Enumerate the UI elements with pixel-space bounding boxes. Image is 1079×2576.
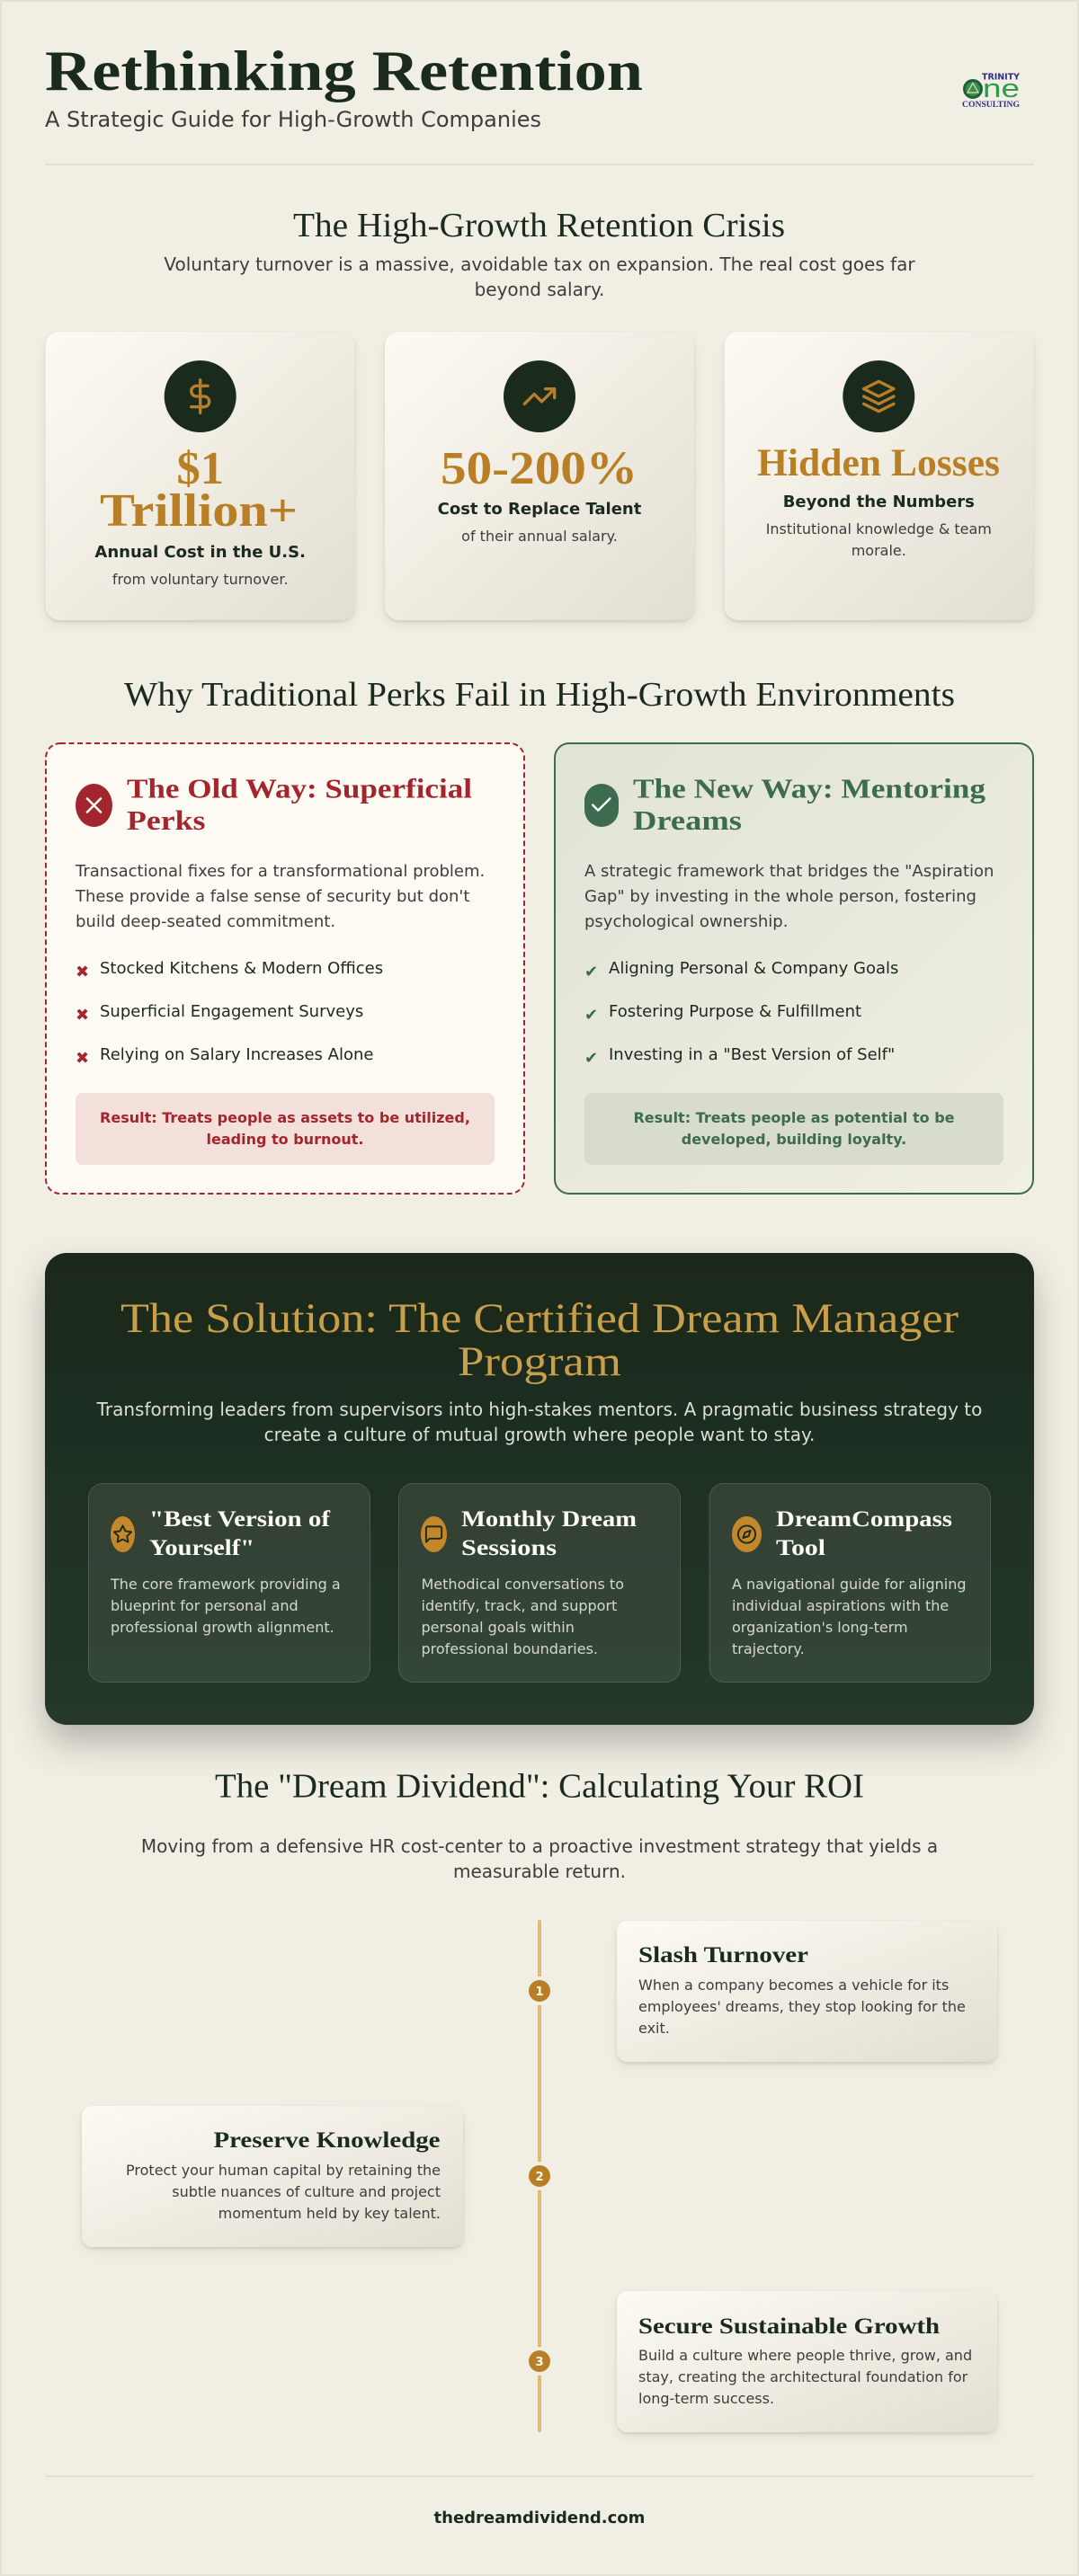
card text: identify, track, and support <box>421 1597 617 1614</box>
panel heading: Program <box>458 1338 621 1385</box>
panel heading: The Solution: The Certified Dream Manager <box>120 1295 959 1342</box>
timeline node 1 <box>525 1976 554 2005</box>
timeline card 1: Slash Turnover <box>638 1941 808 1968</box>
intro text: Voluntary turnover is a massive, avoidable tax on expansion. The real cost goes far <box>164 253 915 275</box>
timeline node 3 <box>525 2347 554 2376</box>
card: dreamcompass tool <box>709 1483 991 1683</box>
list: Investing in a "Best Version of Self" <box>609 1045 895 1064</box>
card text: Methodical conversations to <box>421 1576 624 1593</box>
list: Relying on Salary Increases Alone <box>100 1045 373 1064</box>
panel heading: The Old Way: Superficial <box>127 773 472 804</box>
stat value: $1 <box>176 443 224 494</box>
result callout: developed, building loyalty. <box>682 1131 906 1148</box>
list: Aligning Personal & Company Goals <box>609 959 898 978</box>
logo: Trinity One Consulting: CONSULTING <box>962 100 1020 109</box>
section: retention crisis <box>164 207 915 300</box>
subtitle: A Strategic Guide for High-Growth Companies <box>45 107 541 132</box>
stat note: Institutional knowledge & team <box>766 520 992 537</box>
stat card: 50-200% <box>385 332 694 620</box>
header <box>45 39 1021 132</box>
card heading: Sessions <box>461 1536 557 1560</box>
card: best version of yourself <box>88 1483 370 1683</box>
panel intro: Transforming leaders from supervisors into high-stakes mentors. A pragmatic business strategy to <box>96 1399 982 1420</box>
section: dream dividend <box>141 1767 938 1882</box>
timeline card 3: Build a culture where people thrive, grow, and <box>638 2347 972 2364</box>
logo: Trinity One Consulting <box>962 72 1021 109</box>
list: Stocked Kitchens & Modern Offices <box>100 959 383 978</box>
icon: dollar <box>165 360 236 432</box>
panel: the old way <box>46 743 524 1194</box>
logo: Trinity One Consulting: TRINITY <box>982 72 1021 83</box>
timeline card 1: exit. <box>638 2020 670 2037</box>
panel text: Transactional fixes for a transformational problem. <box>75 862 485 881</box>
timeline card 3 <box>617 2291 997 2432</box>
card: monthly dream sessions <box>399 1483 680 1683</box>
result callout: leading to burnout. <box>207 1131 363 1148</box>
list: Fostering Purpose & Fulfillment <box>609 1002 861 1021</box>
intro text: beyond salary. <box>475 279 604 300</box>
card heading: Tool <box>776 1536 825 1560</box>
panel heading: Dreams <box>633 804 742 836</box>
card heading: Yourself" <box>149 1536 254 1560</box>
list: ✖ <box>76 1049 89 1068</box>
list: ✖ <box>76 963 89 982</box>
title: Rethinking Retention <box>45 39 643 102</box>
panel: the solution <box>45 1253 1034 1725</box>
result callout: Result: Treats people as assets to be utilized, <box>100 1109 470 1126</box>
logo: Trinity One Consulting: ne <box>983 75 1020 103</box>
card text: professional boundaries. <box>421 1640 598 1657</box>
heading: The High-Growth Retention Crisis <box>293 207 785 244</box>
icon: check <box>584 784 619 827</box>
list: Superficial Engagement Surveys <box>100 1002 363 1021</box>
icon: x <box>76 784 112 827</box>
timeline card 1: employees' dreams, they stop looking for the <box>638 1998 966 2015</box>
timeline card 2: subtle nuances of culture and project <box>172 2183 441 2200</box>
timeline node 2 <box>525 2162 554 2190</box>
card heading: "Best Version of <box>149 1507 331 1532</box>
timeline card 2 <box>82 2106 463 2247</box>
panel intro: create a culture of mutual growth where people want to stay. <box>264 1424 815 1445</box>
stat card: Hidden Losses <box>725 332 1034 620</box>
list <box>76 959 383 1068</box>
timeline card 1: When a company becomes a vehicle for its <box>638 1976 949 1994</box>
list: ✖ <box>76 1006 89 1025</box>
heading: The "Dream Dividend": Calculating Your ROI <box>215 1767 864 1805</box>
panel heading: The New Way: Mentoring <box>633 773 986 804</box>
timeline card 2: momentum held by key talent. <box>218 2205 441 2222</box>
panel text: These provide a false sense of security but don't <box>75 887 469 906</box>
timeline card 2: Preserve Knowledge <box>214 2127 441 2153</box>
stat value: Trillion+ <box>100 485 298 537</box>
stat label: Annual Cost in the U.S. <box>94 543 306 562</box>
timeline node 1: 1 <box>535 1985 544 1999</box>
card text: individual aspirations with the <box>732 1597 949 1614</box>
list <box>584 959 898 1068</box>
card text: blueprint for personal and <box>111 1597 299 1614</box>
list: ✔ <box>584 1006 598 1025</box>
intro text: Moving from a defensive HR cost-center to a proactive investment strategy that yields a <box>141 1835 938 1857</box>
stat note: from voluntary turnover. <box>112 571 289 588</box>
card text: professional growth alignment. <box>111 1619 334 1636</box>
panel text: Gap" by investing in the whole person, fostering <box>584 887 976 906</box>
list: ✔ <box>584 1049 598 1068</box>
panel text: A strategic framework that bridges the "Aspiration <box>584 862 994 881</box>
icon: compass <box>732 1516 762 1552</box>
timeline card 1 <box>617 1921 997 2062</box>
card text: trajectory. <box>732 1640 805 1657</box>
timeline card 3: long-term success. <box>638 2390 774 2407</box>
card text: organization's long-term <box>732 1619 908 1636</box>
stat value: 50-200% <box>441 443 638 494</box>
card text: The core framework providing a <box>110 1576 341 1593</box>
icon: star <box>111 1516 135 1552</box>
panel: the new way <box>555 743 1033 1194</box>
panel text: build deep-seated commitment. <box>76 912 335 931</box>
card text: personal goals within <box>421 1619 575 1636</box>
icon: message <box>421 1516 447 1552</box>
stat note: of their annual salary. <box>461 528 618 545</box>
timeline node 2: 2 <box>535 2171 544 2184</box>
timeline line <box>538 1920 541 2432</box>
list: ✔ <box>584 963 598 982</box>
stat label: Cost to Replace Talent <box>438 500 642 519</box>
stat card: $1 Trillion+ <box>45 332 354 620</box>
result callout <box>584 1093 1003 1165</box>
card heading: Monthly Dream <box>461 1507 637 1532</box>
card heading: DreamCompass <box>776 1507 952 1532</box>
timeline node 3: 3 <box>535 2356 544 2369</box>
intro text: measurable return. <box>453 1861 626 1882</box>
icon: trending up <box>504 360 575 432</box>
card text: A navigational guide for aligning <box>732 1576 966 1593</box>
timeline <box>82 1920 997 2432</box>
result callout: Result: Treats people as potential to be <box>633 1109 955 1126</box>
footer: thedreamdividend.com <box>434 2509 645 2527</box>
timeline card 2: Protect your human capital by retaining the <box>126 2162 441 2179</box>
stat label: Beyond the Numbers <box>783 493 975 511</box>
stat note: morale. <box>852 542 906 559</box>
panel text: psychological ownership. <box>584 912 788 931</box>
stat value: Hidden Losses <box>757 442 1000 484</box>
panel heading: Perks <box>127 804 205 836</box>
heading: why perks fail: Why Traditional Perks Fail in High-Growth Environments <box>124 676 955 714</box>
result callout <box>76 1093 495 1165</box>
icon: layers <box>843 360 914 432</box>
timeline card 3: Secure Sustainable Growth <box>638 2313 940 2339</box>
timeline card 3: stay, creating the architectural foundation for <box>638 2368 968 2385</box>
